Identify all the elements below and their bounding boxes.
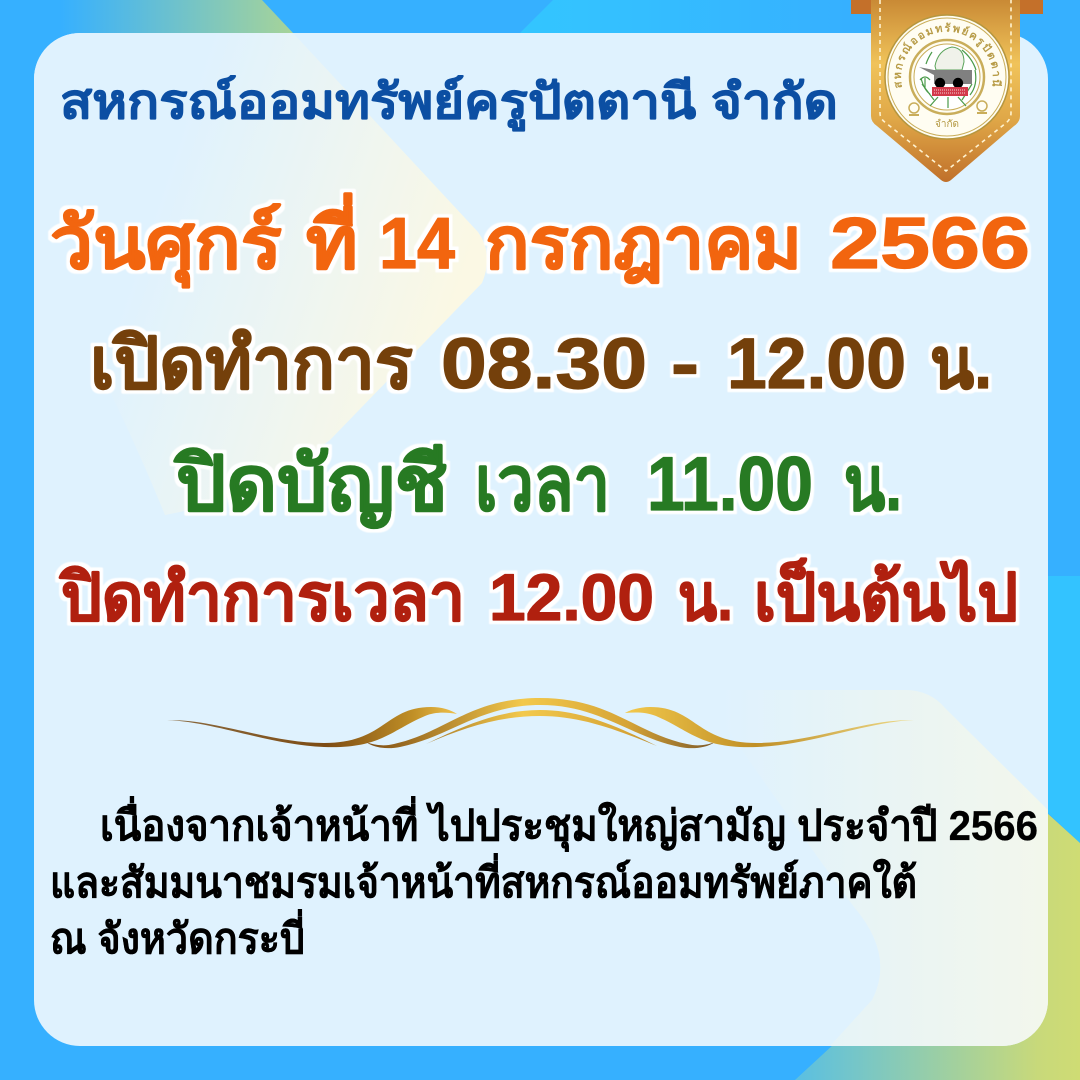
heading: date: กรกฎาคม: [485, 204, 802, 284]
text: opening hours: [90, 325, 992, 404]
heading: date: ที่: [306, 192, 358, 284]
text: opening hours: -: [671, 325, 699, 404]
text: account closing time: เวลา: [475, 442, 610, 527]
text block: explanation: [50, 796, 1038, 962]
emblem lower text: จำกัด: [935, 119, 959, 130]
decorative gold swoosh divider: [167, 698, 914, 748]
text: office closing time: เป็นต้นไป: [754, 557, 1018, 634]
text block: explanation: ณ จังหวัดกระบี่: [50, 909, 305, 962]
ribbon stitching: [880, 0, 1011, 171]
text block: explanation: เนื่องจากเจ้าหน้าที่ ไปประชุมใหญ่สามัญ ประจำปี 2566: [100, 796, 1038, 852]
text: opening hours: 08.30: [441, 325, 647, 404]
text: opening hours: 12.00: [727, 325, 906, 404]
heading: date: 2566: [830, 204, 1030, 284]
text: account closing time: ปิดบัญชี: [173, 442, 448, 529]
ribbon pennant: [871, 0, 1020, 182]
emblem side ornaments: [909, 103, 919, 113]
title: cooperative name: สหกรณ์ออมทรัพย์ครูปัตตานี จำกัด: [60, 75, 838, 132]
emblem seal: [884, 14, 1010, 140]
text: office closing time: ปิดทำการเวลา: [59, 560, 465, 634]
text: opening hours: น.: [930, 325, 992, 404]
heading: date: วันศุกร์: [50, 203, 282, 289]
text block: explanation: และสัมมนาชมรมเจ้าหน้าที่สหกรณ์ออมทรัพย์ภาคใต้: [50, 853, 917, 906]
heading: date: 14: [379, 204, 455, 284]
emblem ring text: สหกรณ์ออมทรัพย์ครูปัตตานี: [894, 22, 1002, 88]
emblem red base: [932, 87, 968, 96]
text: office closing time: 12.00: [489, 560, 654, 634]
emblem cannon: [919, 67, 972, 84]
text: account closing time: น.: [844, 442, 902, 527]
ribbon back band: [851, 0, 1043, 14]
ribbon badge with emblem: [851, 0, 1043, 182]
heading: date: [50, 192, 1030, 289]
text: office closing time: น.: [678, 560, 733, 634]
emblem hill and palm: [935, 47, 964, 70]
text: opening hours: เปิดทำการ: [90, 325, 413, 404]
text: account closing time: 11.00: [647, 442, 813, 527]
text: account closing time: [173, 442, 902, 529]
text: office closing time: [59, 557, 1018, 634]
